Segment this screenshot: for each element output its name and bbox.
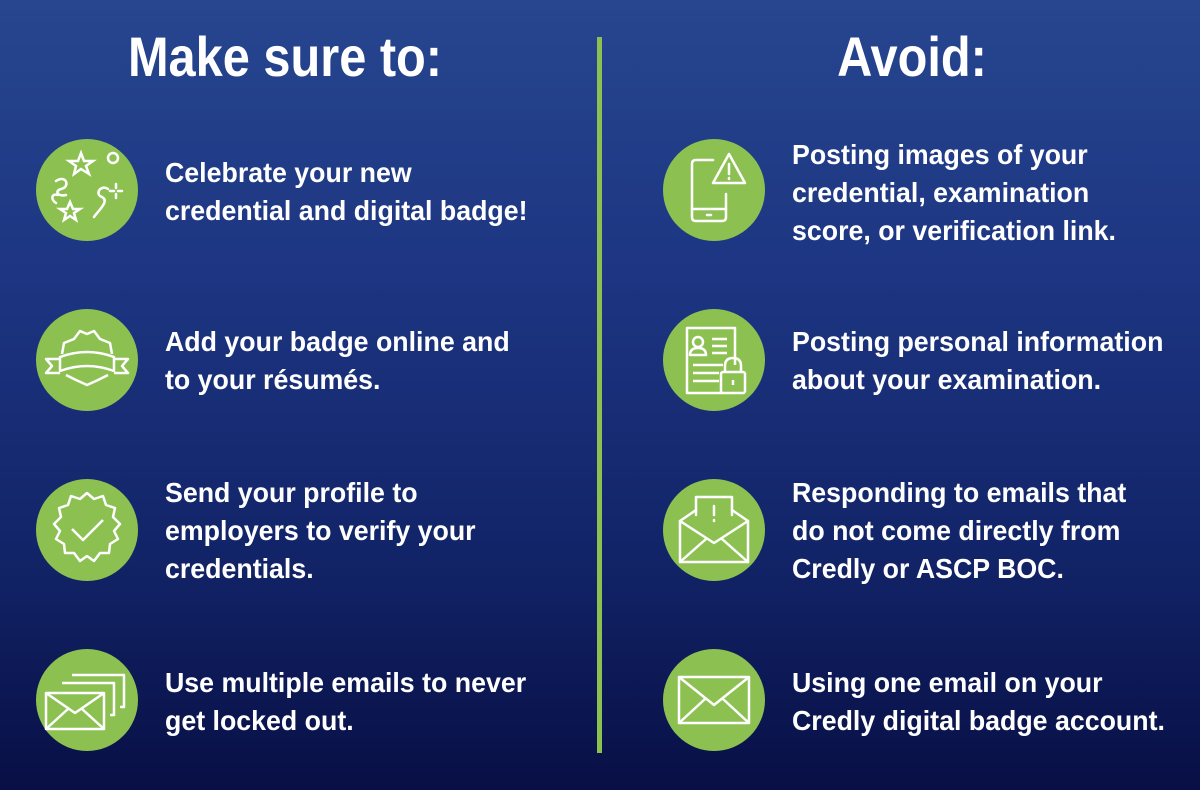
text: personal info [792,326,1163,395]
text: send profile: employers to verify your [165,515,476,546]
text: multiple emails: Use multiple emails to never [165,667,526,698]
text: send profile [165,477,476,584]
text: posting images [792,139,1116,246]
text: responding to emails [792,477,1126,584]
text: add badge: Add your badge online and [165,326,510,357]
text: celebrate: credential and digital badge! [165,195,528,226]
text: one email: Credly digital badge account. [792,705,1165,736]
text: multiple emails [165,667,526,736]
text: posting images: score, or verification link. [792,215,1116,246]
icon: envelope [663,649,765,751]
text: personal info: about your examination. [792,364,1101,395]
text: responding to emails: Credly or ASCP BOC. [792,553,1064,584]
text: posting images: Posting images of your [792,139,1088,170]
text: posting images: credential, examination [792,177,1089,208]
icon: document lock [663,309,765,411]
text: add badge: to your résumés. [165,364,380,395]
text: celebrate [165,157,528,226]
icon: open envelope alert [663,479,765,581]
icon: phone warning [663,139,765,241]
title: Make sure to: Make sure to: [128,25,442,88]
text: add badge [165,326,510,395]
text: personal info: Posting personal information [792,326,1163,357]
text: one email: Using one email on your [792,667,1103,698]
text: responding to emails: Responding to emails that [792,477,1126,508]
icon: verified check [36,479,138,581]
icon: celebration [36,139,138,241]
text: send profile: Send your profile to [165,477,418,508]
text: one email [792,667,1165,736]
text: celebrate: Celebrate your new [165,157,412,188]
icon: badge ribbon [36,309,138,411]
divider line [597,37,602,753]
text: multiple emails: get locked out. [165,705,354,736]
text: send profile: credentials. [165,553,314,584]
icon: multiple envelopes [36,649,138,751]
text: responding to emails: do not come directly from [792,515,1120,546]
title: Avoid: Avoid: [837,25,987,88]
